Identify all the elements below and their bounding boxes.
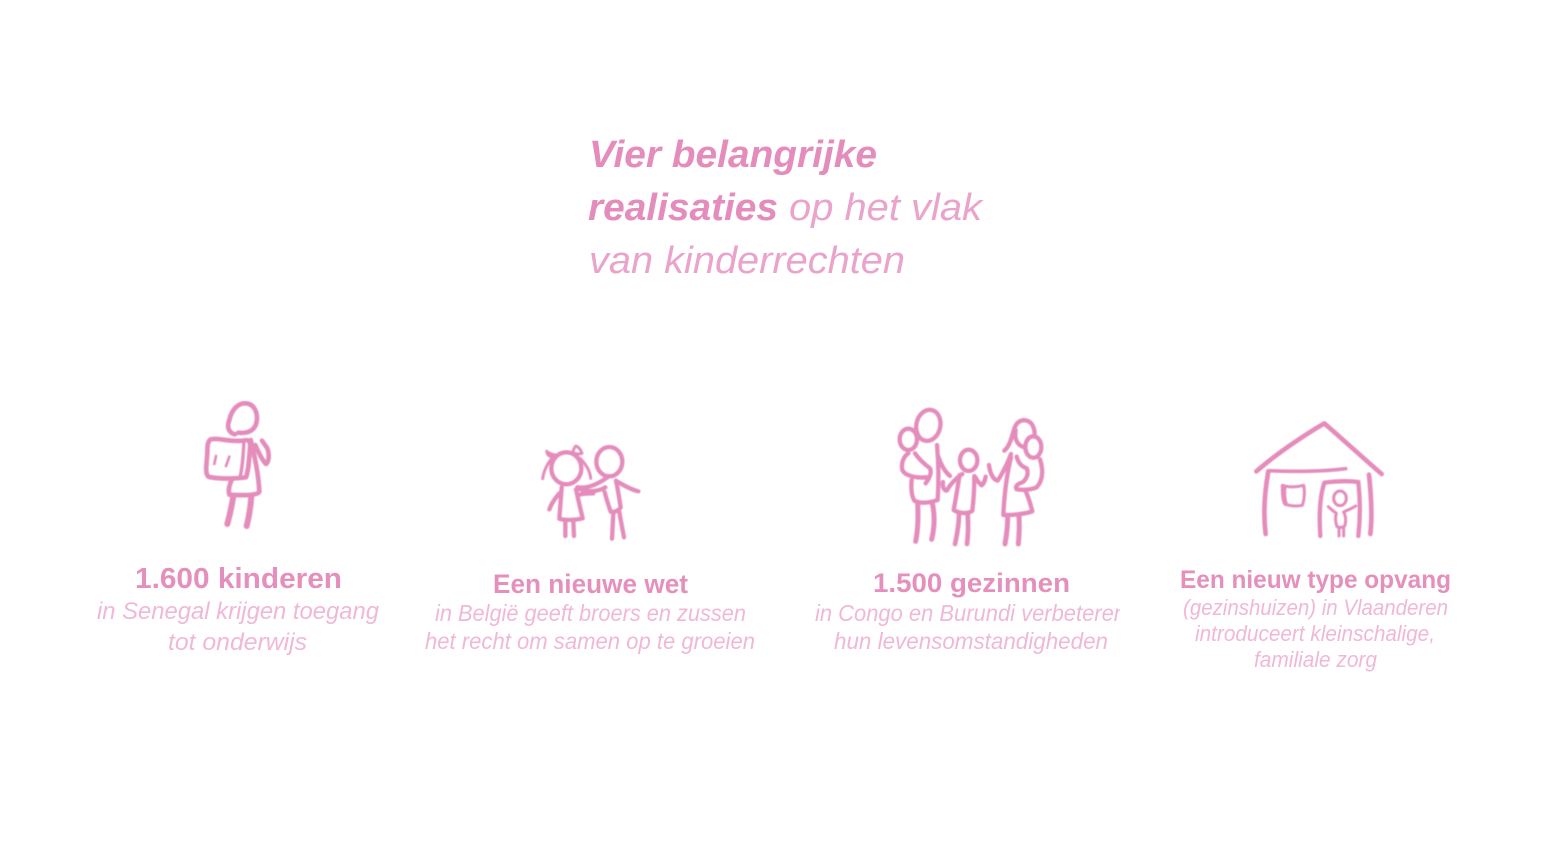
- text: Senegal: in Senegal krijgen toegang: [97, 598, 380, 625]
- heading: 1.600 kinderen: 1.600 kinderen: [135, 563, 342, 595]
- heading: Een nieuwe wet: Een nieuwe wet: [493, 569, 688, 599]
- panel: 1.600 kinderen: [97, 403, 380, 656]
- icon: house with child: [1256, 423, 1382, 536]
- text: België: [425, 600, 755, 654]
- text: gezinshuizen: introduceert kleinschalige,: [1195, 621, 1435, 646]
- title: op het vlak: [789, 187, 984, 229]
- panel: 1.500 gezinnen: [815, 408, 1126, 654]
- text: Congo en Burundi: in Congo en Burundi verbeteren: [815, 600, 1126, 626]
- text: België: in België geeft broers en zussen: [435, 600, 746, 626]
- title: Vier belangrijke: [589, 134, 877, 176]
- title: [588, 134, 984, 282]
- icon: family: [900, 408, 1042, 544]
- heading: Een nieuw type opvang: Een nieuw type opvang: [1180, 566, 1451, 594]
- icon: child with backpack: [206, 403, 269, 526]
- title: realisaties: [588, 187, 778, 229]
- text: Senegal: tot onderwijs: [168, 629, 307, 656]
- panel: Een nieuw type opvang: [1180, 423, 1451, 672]
- panel: Een nieuwe wet: [425, 446, 755, 654]
- icon: two children: [543, 446, 638, 539]
- text: gezinshuizen: (gezinshuizen) in Vlaanderen: [1183, 595, 1448, 620]
- title: van kinderrechten: [589, 240, 905, 282]
- text: gezinshuizen: familiale zorg: [1254, 647, 1378, 672]
- text: Senegal: [97, 598, 380, 656]
- text: België: het recht om samen op te groeien: [425, 628, 755, 654]
- text: Congo en Burundi: [815, 600, 1126, 654]
- heading: 1.500 gezinnen: 1.500 gezinnen: [873, 568, 1070, 598]
- text: Congo en Burundi: hun levensomstandigheden: [834, 628, 1108, 654]
- text: gezinshuizen: [1183, 595, 1448, 672]
